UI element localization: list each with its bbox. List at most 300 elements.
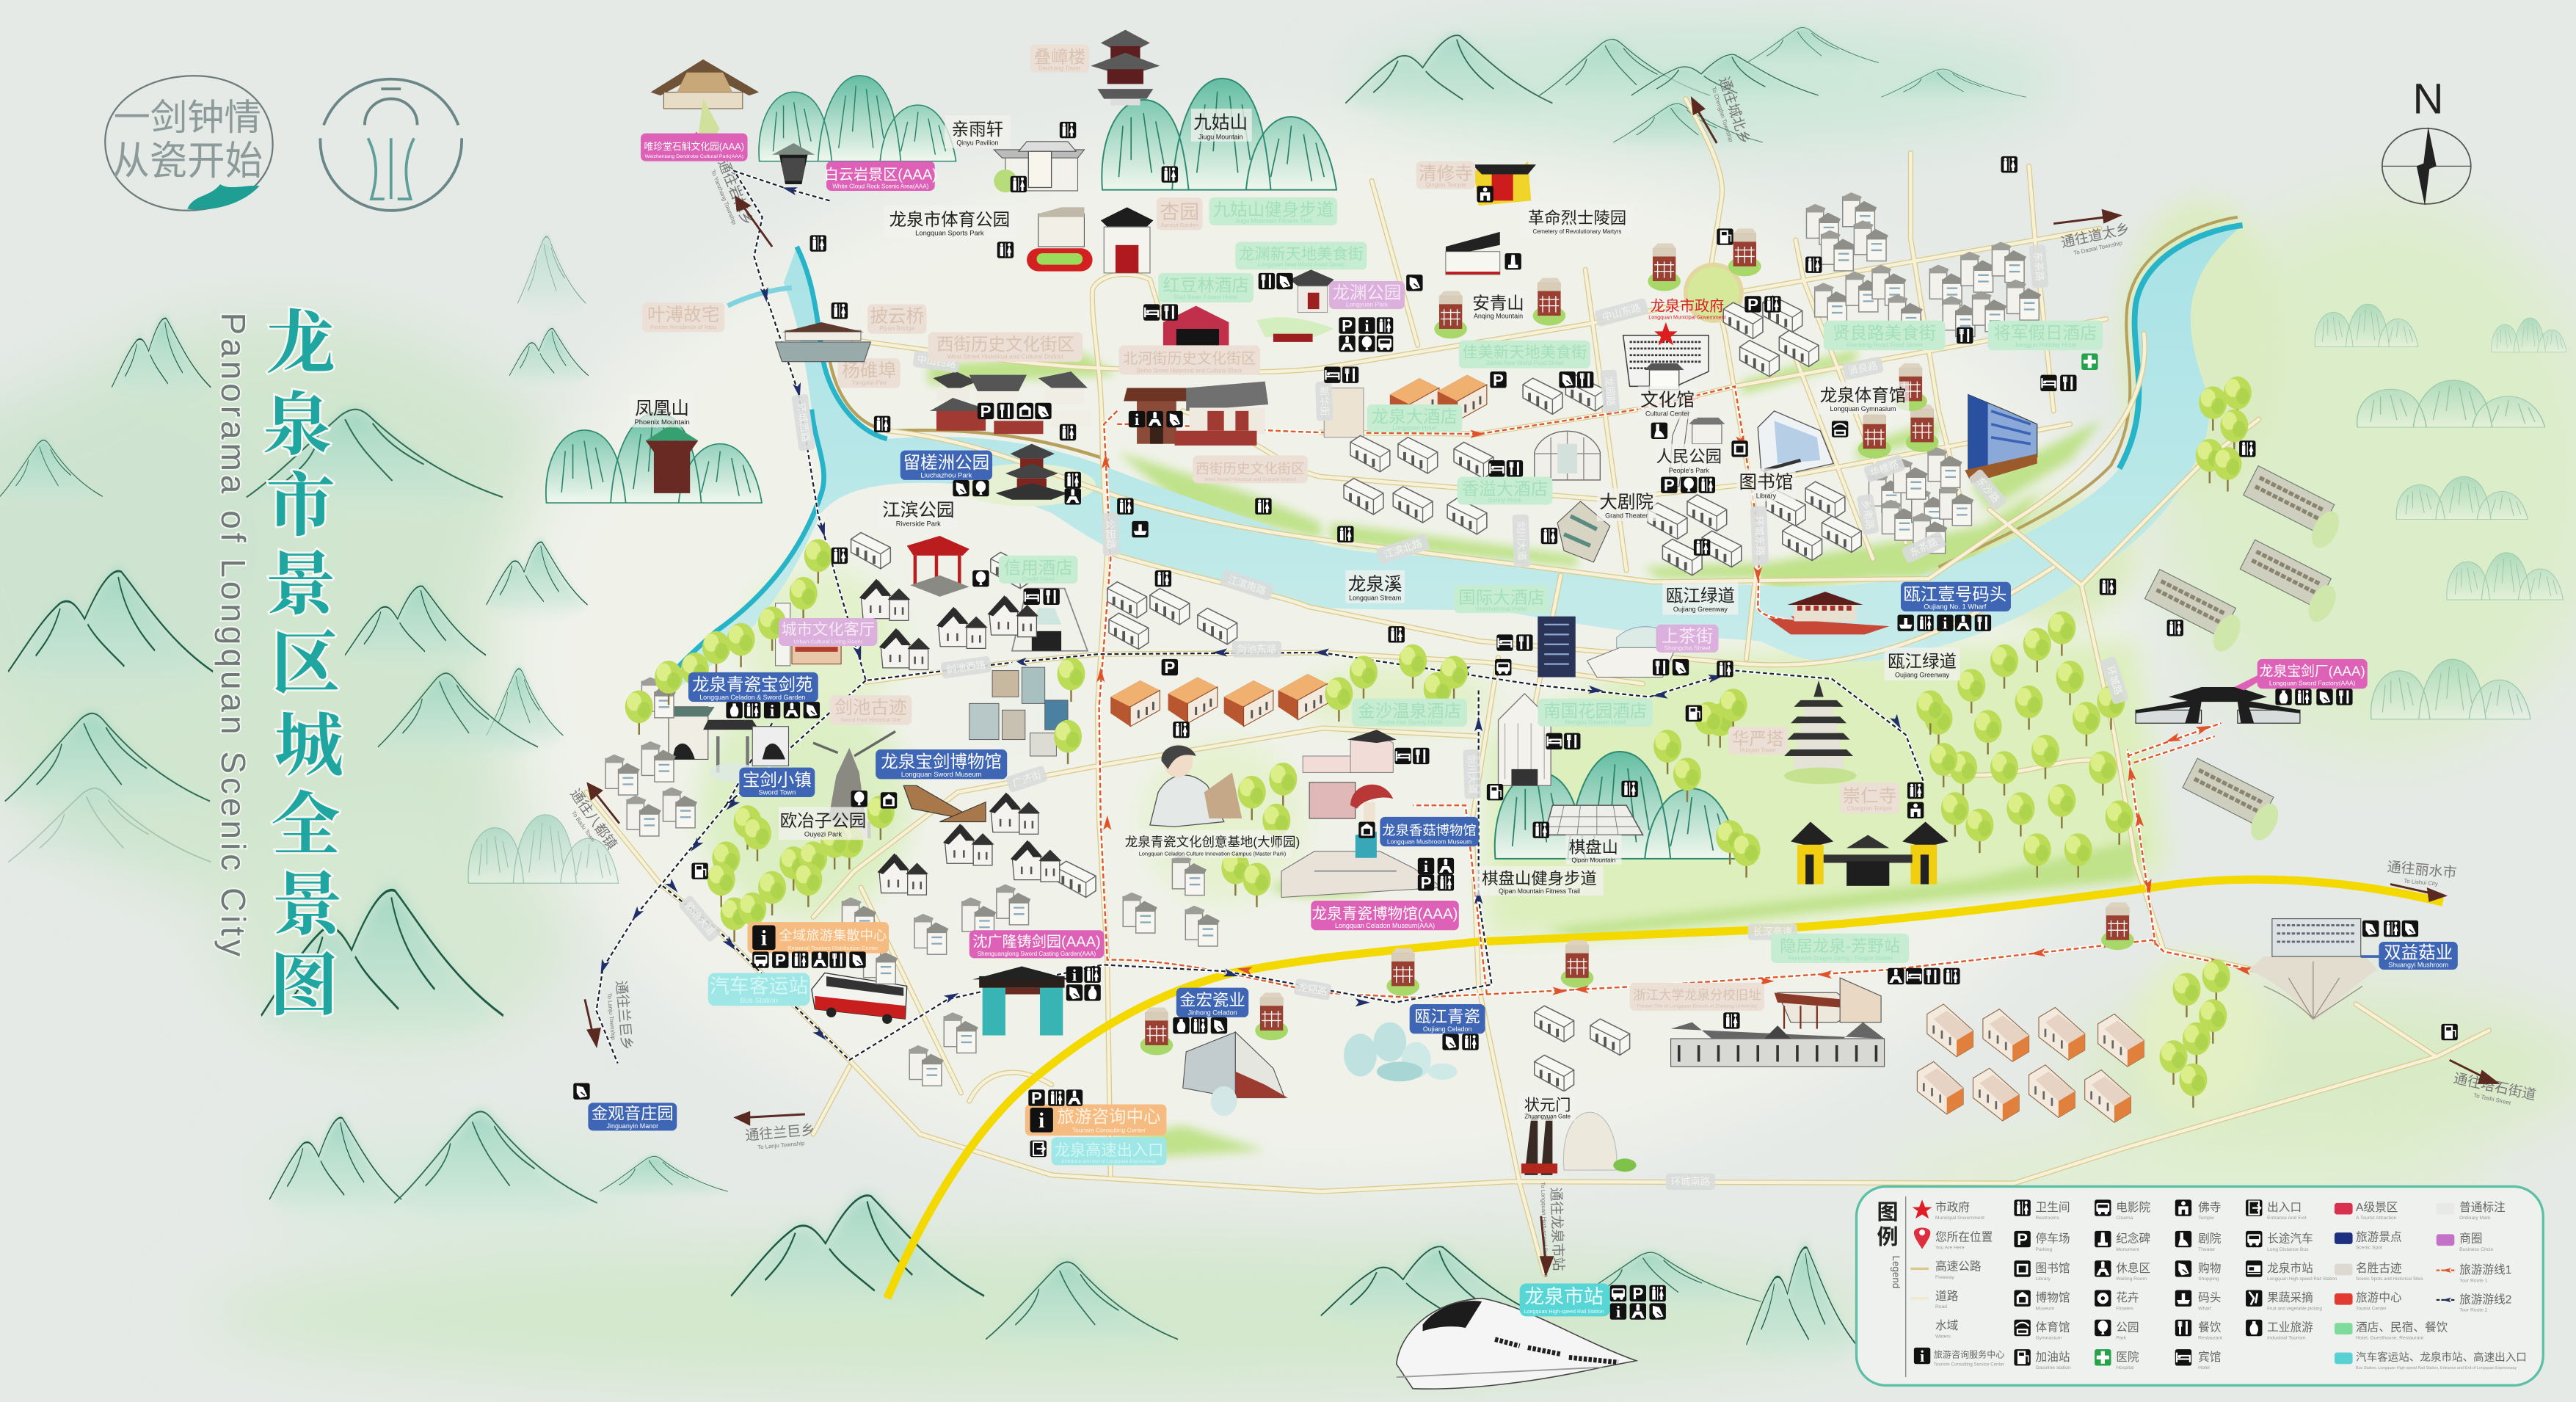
river: Oujiang and Longquan stream [657, 217, 2243, 690]
panel: legend [1857, 1186, 2543, 1385]
label: 大剧院: Grand Theater [1605, 512, 1648, 519]
legend column 2: Gasoline station [2036, 1365, 2071, 1370]
legend column 7: 旅游游线2 [2459, 1293, 2511, 1306]
label: 国际大酒店 [1454, 585, 1549, 613]
label: 旅游咨询中心 [1025, 1105, 1166, 1136]
label: 杨碓埠: Yangdui Pier [851, 379, 887, 386]
label: 龙泉市政府: 龙泉市政府 [1651, 297, 1724, 314]
legend column 2: Library [2036, 1276, 2051, 1282]
legend column 5: 工业旅游 [2267, 1321, 2313, 1334]
landmark: Former Zhejiang University site [1671, 1023, 1885, 1067]
road name labels: 欧冶大道 [683, 900, 717, 937]
label: 北河街历史文化街区: Beihe Street Historical and Cultural Block [1137, 367, 1242, 374]
label: 图书馆 [1736, 468, 1796, 501]
legend column 4: Restaurant [2198, 1336, 2222, 1341]
label: 龙泉大酒店: Longquan Hotel [1392, 424, 1436, 432]
legend column 5: Entrance And Exit [2267, 1216, 2307, 1221]
compass [2382, 76, 2471, 206]
road name labels [677, 244, 2129, 1190]
legend column 2: Museum [2036, 1306, 2055, 1311]
label: 瓯江绿道 west [1662, 582, 1738, 614]
road name labels: 龙园路 [1604, 376, 1617, 407]
label: 沈广隆铸剑园 [969, 930, 1104, 958]
legend column 7: Tour Route 1 [2459, 1278, 2488, 1283]
legend column 6: 汽车客运站、龙泉市站、高速出入口 [2356, 1351, 2527, 1364]
direction notes: To Daotai Township [2073, 239, 2123, 256]
label: 棋盘山 [1565, 835, 1621, 865]
label: 龙泉市体育公园 [884, 206, 1015, 239]
label: 隐居龙泉-芳野站: 隐居龙泉-芳野站 [1780, 937, 1900, 955]
label: 浙江大学龙泉分校旧址: Former Site of Longquan Branch of Zhejiang University [1637, 1003, 1758, 1009]
legend column 2: 图书馆 [2036, 1262, 2070, 1275]
road name labels: 长深高速 [1753, 926, 1792, 937]
legend column 5: Industrial Tourism [2267, 1336, 2306, 1341]
label: 龙泉宝剑厂 [2257, 659, 2368, 689]
legend column 4: 剧院 [2198, 1232, 2222, 1246]
label: 棋盘山健身步道: Qipan Mountain Fitness Trail [1499, 887, 1580, 895]
green parks and wash [698, 197, 2284, 1158]
legend column 4: 佛寺 [2198, 1201, 2221, 1214]
label: 龙泉市政府 [1648, 297, 1726, 321]
label: 剑池古迹 [829, 695, 912, 724]
label: 龙渊新天地美食街: 龙渊新天地美食街 [1239, 245, 1364, 263]
landmark: Apricot Garden gate [1101, 207, 1153, 273]
label: 沈广隆铸剑园: 沈广隆铸剑园(AAA) [972, 934, 1101, 951]
label: 瓯江青瓷 [1410, 1004, 1485, 1034]
title in Chinese: 全 [271, 769, 340, 868]
legend column 1: Freeway [1935, 1275, 1954, 1280]
legend column 1: 旅游咨询服务中心 [1934, 1348, 2004, 1359]
label: 将军假日酒店: 将军假日酒店 [1993, 323, 2097, 342]
label: 隐居龙泉-芳野站 [1771, 934, 1909, 963]
label: 杏园 [1157, 197, 1203, 230]
label: 安青山 [1470, 289, 1527, 321]
residential blocks [851, 296, 1861, 1092]
label: 龙泉青瓷博物馆 [1311, 901, 1459, 930]
legend column 2: Parking [2036, 1247, 2053, 1252]
direction notes: To Yanzhang Township [710, 169, 738, 226]
label: 龙泉溪: Longquan Stream [1349, 594, 1401, 601]
label: 龙泉香菇博物馆: 龙泉香菇博物馆 [1382, 822, 1477, 838]
red-brick buildings [1140, 228, 2134, 1055]
label: 革命烈士陵园: Cemetery of Revolutionary Martyrs [1533, 228, 1622, 235]
label: 龙泉青瓷文化创意基地: Longquan Celadon Culture Innovation Campus (Master Park) [1139, 850, 1286, 857]
legend column 7: 旅游游线1 [2459, 1263, 2511, 1276]
label: 龙泉宝剑博物馆: 龙泉宝剑博物馆 [881, 752, 1002, 771]
label: 人民公园: 人民公园 [1656, 447, 1722, 465]
hills: east pale range [2315, 304, 2566, 719]
label: 九姑山健身步道: 九姑山健身步道 [1213, 200, 1334, 219]
label: 披云桥: 披云桥 [870, 306, 924, 327]
route arrows [597, 184, 2252, 1043]
landmark: Nanguo Garden Hotel [1499, 694, 1551, 785]
road name labels: 东茶路 [2032, 251, 2045, 282]
label: 西街历史文化街区 south: 西街历史文化街区 [1196, 461, 1305, 476]
label: 红豆林酒店 [1158, 273, 1254, 302]
direction notes: 通往塔石街道 [2452, 1070, 2537, 1103]
landmark: Weizhentang park pavilion [650, 59, 759, 148]
landmark: Gymnasium [1758, 411, 1833, 476]
label: 江滨公园: 江滨公园 [882, 500, 955, 520]
label: 将军假日酒店: Jiangjun Holiday Hotel [2015, 341, 2076, 349]
label: 龙泉青瓷文化创意基地: 龙泉青瓷文化创意基地(大师园) [1125, 835, 1300, 849]
label: 龙泉青瓷文化创意基地 [1125, 830, 1300, 858]
direction notes: To Badu Town [570, 810, 596, 843]
label: 佳美新天地美食街: 佳美新天地美食街 [1462, 344, 1587, 361]
label: 金宏瓷业: 金宏瓷业 [1179, 991, 1245, 1009]
legend column 5: 果蔬采摘 [2267, 1291, 2313, 1304]
label: 安青山: Anqing Mountain [1474, 312, 1523, 319]
legend column 6: 名胜古迹 [2356, 1262, 2402, 1275]
label: 华严塔 [1728, 727, 1788, 755]
landmark: Red Bean Forest Hotel [1163, 306, 1229, 350]
landmark: Black lantern pavilion [772, 143, 815, 184]
road name labels: 剑川大道 [1466, 755, 1478, 794]
label: 九姑山: 九姑山 [1193, 112, 1248, 133]
label: 叶溥故宅 [642, 302, 724, 332]
direction notes: 通往城北乡 [1716, 75, 1753, 146]
direction notes: To Lanju Township [606, 992, 616, 1041]
label: 西街历史文化街区 north [928, 332, 1083, 362]
label: 棋盘山: 棋盘山 [1569, 838, 1618, 857]
label: 佳美新天地美食街: Jiamei New World Food Street [1485, 360, 1564, 366]
expressway [887, 879, 2443, 1299]
legend column 4: Theater [2198, 1247, 2216, 1252]
label: 留槎洲公园: Liuchazhou Park [920, 471, 972, 479]
label: 唯珍堂石斛文化园: Weizhentang Dendrobe Cultural Park(AAA) [645, 154, 743, 159]
label: 金观音庄园 [588, 1103, 677, 1130]
road name labels: 广济街 [1011, 769, 1043, 789]
label: 瓯江壹号码头 [1901, 582, 2011, 611]
label: 西街历史文化街区 north: West Street Historical and Cultural District [947, 352, 1064, 360]
label: 欧冶子公园 [779, 807, 867, 840]
title in Chinese: 景 [266, 529, 337, 628]
label: 清修寺 [1416, 161, 1475, 189]
label: 金沙温泉酒店: Jinsha Hot Spring Hotel [1377, 718, 1442, 725]
label: 龙泉市站 [1520, 1284, 1610, 1316]
direction notes: To Longquan High-speed Rail Station [1540, 1182, 1549, 1277]
label: 龙泉市站: 龙泉市站 [1524, 1285, 1604, 1307]
direction notes: 通往兰巨乡 [744, 1122, 815, 1144]
label: 留槎洲公园 [900, 451, 992, 480]
label: 红豆林酒店: 红豆林酒店 [1163, 275, 1249, 294]
legend column 7 [2437, 1201, 2511, 1313]
label: 双益菇业: Shuangyi Mushroom [2388, 962, 2448, 969]
label: 金沙温泉酒店: 金沙温泉酒店 [1358, 701, 1461, 720]
label: 沈广隆铸剑园: Shenguanglong Sword Casting Garden(AAA) [978, 951, 1096, 957]
compass: N [2413, 76, 2444, 123]
label: 白云岩景区: White Cloud Rock Scenic Area(AAA) [832, 184, 929, 190]
landmark: Martyrs Cemetery [1446, 232, 1500, 275]
legend column 7: Ordinary Mark [2459, 1216, 2491, 1221]
logo: vase circle [320, 79, 462, 211]
landmark: Zhuangyuan gate [1521, 1112, 1637, 1175]
landmark: Diezhang Tower [1091, 30, 1160, 106]
landmark: Jiangjun Holiday Hotel [1965, 395, 2037, 483]
label: 龙泉香菇博物馆 [1380, 817, 1479, 846]
label: 白云岩景区 [824, 161, 937, 191]
label: 金观音庄园: Jinguanyin Manor [607, 1122, 658, 1130]
label: 汽车客运站 [708, 973, 810, 1006]
legend column 3: 医院 [2116, 1350, 2139, 1364]
label: 文化馆: Cultural Center [1645, 410, 1689, 418]
legend column 2 [2014, 1199, 2071, 1370]
label: 西街历史文化街区 south: West Street Historical and Cultural District [1204, 477, 1296, 482]
map service icons [573, 122, 2458, 1321]
label: 披云桥 [867, 304, 927, 334]
label: 叠嶂楼: Diezhang Tower [1038, 65, 1081, 71]
label: 汽车客运站: 汽车客运站 [710, 975, 808, 997]
label: 龙泉大酒店 [1367, 404, 1462, 432]
landmark: Urban Cultural Living Room [776, 603, 841, 666]
label: 南国花园酒店: Nanguo Garden Hotel [1565, 718, 1626, 725]
legend heading: 图 [1877, 1201, 1899, 1224]
legend column 4: 宾馆 [2198, 1351, 2221, 1364]
label: 崇仁寺 [1840, 782, 1899, 813]
legend column 2: 加油站 [2036, 1351, 2070, 1364]
label: 龙泉香菇博物馆: Longquan Mushroom Museum [1387, 838, 1471, 846]
landmark: Longquan Hotel block [1324, 388, 1364, 437]
road name labels: 环城西路 [795, 402, 812, 443]
road name labels: 剑川大道 [1515, 521, 1527, 561]
legend column 2: 体育馆 [2036, 1321, 2070, 1334]
label: 龙渊新天地美食街: Longyuan New World Food Street [1258, 261, 1345, 268]
label: 旅游咨询中心: 旅游咨询中心 [1058, 1107, 1161, 1126]
landmark: Culture Center and People's Park [1669, 411, 1725, 487]
direction notes: To Lanju Township [757, 1140, 805, 1151]
mountains: west range [0, 236, 619, 1050]
label: 崇仁寺: 崇仁寺 [1843, 786, 1896, 807]
label: 全域旅游集散中心: Regional Tourism Distribution Center [787, 945, 878, 951]
legend column 6 [2335, 1201, 2527, 1370]
title in Chinese: 龙 [266, 287, 335, 386]
label: 龙泉宝剑厂: Longquan Sword Factory(AAA) [2269, 680, 2356, 687]
label: 叠嶂楼: 叠嶂楼 [1034, 47, 1085, 66]
legend column 2: 博物馆 [2036, 1291, 2070, 1304]
label: 隐居龙泉-芳野站: Reclusive Dragon Spring - Fangye Station [1788, 955, 1892, 962]
label: 龙泉溪 [1345, 570, 1405, 603]
label: 龙泉宝剑博物馆 [876, 749, 1007, 779]
hill: Jiugu Mountain [1102, 79, 1336, 190]
legend column 6: Scenic Spot [2356, 1246, 2382, 1251]
label: 文化馆: 文化馆 [1640, 390, 1695, 410]
legend column 5: Long Distance Bus [2267, 1247, 2309, 1252]
title in English: Panorama of Longquan Scenic City [214, 313, 252, 956]
label: 信用酒店 [999, 556, 1077, 584]
label: 白云岩景区: 白云岩景区(AAA) [824, 166, 937, 183]
label: 状元门: 状元门 [1524, 1096, 1571, 1114]
label: 杏园: 杏园 [1160, 201, 1199, 223]
figure: celadon master artisan [1150, 744, 1242, 827]
label: 留槎洲公园: 留槎洲公园 [903, 453, 989, 472]
legend column 5 [2246, 1199, 2337, 1341]
label: 南国花园酒店 [1538, 699, 1653, 727]
label: 宝剑小镇: Sword Town [758, 788, 796, 796]
label: 城市文化客厅 [779, 618, 877, 646]
landmark: Museum complex [969, 661, 1076, 756]
label: 旅游咨询中心: i [1038, 1109, 1044, 1133]
label: 亲雨轩 [945, 115, 1011, 148]
landmark: Beihe Street gate [1124, 382, 1268, 446]
label: 龙泉青瓷宝剑苑: 龙泉青瓷宝剑苑 [692, 675, 812, 694]
label: 龙泉体育馆 [1817, 382, 1909, 414]
landmark: Fangye Station [1775, 978, 1881, 1029]
landmark: Sword Factory gate [2136, 674, 2300, 723]
label: 佳美新天地美食街 [1459, 341, 1590, 368]
legend column 7: 商圈 [2459, 1232, 2482, 1246]
legend column 3: Waiting Room [2116, 1276, 2147, 1282]
label: 图书馆: Library [1756, 493, 1777, 500]
label: 瓯江绿道 east: Oujiang Greenway [1895, 672, 1950, 679]
logo: slogan seal [105, 76, 273, 211]
legend column 6: 旅游景点 [2356, 1230, 2402, 1243]
label: 龙泉高速出入口: Entrance and exit of Longquan Expressway [1061, 1159, 1157, 1164]
label: 文化馆 [1638, 386, 1697, 419]
legend column 3: Monument [2116, 1247, 2139, 1252]
logo: slogan seal: 一剑钟情 [113, 98, 261, 138]
label: 九姑山健身步道: Jiugu Mountain Fitness Trail [1234, 217, 1312, 225]
road name labels: 环城路 [2105, 665, 2125, 697]
label: 状元门 [1520, 1092, 1576, 1121]
landmark: Sword Museum wedges [903, 785, 986, 822]
legend column 3: 纪念碑 [2116, 1232, 2151, 1246]
label: 龙泉市体育公园: 龙泉市体育公园 [889, 210, 1010, 229]
legend column 4: Temple [2198, 1216, 2214, 1221]
label: 人民公园: People's Park [1669, 467, 1709, 474]
label: 安青山: 安青山 [1472, 294, 1524, 313]
label: 贤良路美食街: 贤良路美食街 [1833, 323, 1936, 342]
label: 杏园: Apricot Garden [1161, 222, 1198, 228]
landmark: Chongren Temple [1791, 822, 1949, 886]
label: 瓯江青瓷: 瓯江青瓷 [1414, 1008, 1480, 1026]
label: 瓯江绿道 east: 瓯江绿道 [1888, 652, 1957, 671]
label: 瓯江青瓷: Oujiang Celadon [1423, 1025, 1471, 1033]
direction notes: 通往八都镇 [567, 786, 620, 852]
landmark: Jinsha hotel row [1303, 730, 1397, 772]
label: 金观音庄园: 金观音庄园 [592, 1105, 674, 1123]
hill: Qipan Mountain [1495, 752, 1739, 859]
legend heading: 例 [1877, 1225, 1899, 1249]
label: 剑池古迹: Sword Pool Historical Site [840, 717, 901, 723]
legend column 3: 休息区 [2116, 1262, 2150, 1275]
legend column 4 [2175, 1199, 2222, 1370]
legend column 5: Fruit and vegetable picking [2267, 1306, 2322, 1311]
label: 华严塔: Huayan Tower [1739, 747, 1777, 753]
label: 华严塔: 华严塔 [1732, 729, 1783, 748]
label: 龙泉宝剑厂: 龙泉宝剑厂(AAA) [2260, 663, 2365, 678]
road name labels: 贤良路 [1847, 360, 1879, 377]
legend column 3: Flowers [2116, 1306, 2133, 1311]
legend column 1: 水域 [1935, 1319, 1959, 1332]
legend column 1: 您所在位置 [1935, 1230, 1993, 1243]
road name labels: 中山西路 [916, 354, 957, 370]
legend column 5: 龙泉市站 [2267, 1262, 2313, 1275]
label: 金宏瓷业 [1176, 988, 1248, 1017]
title in Chinese [263, 287, 343, 1029]
landmark: Piyun covered bridge [776, 322, 870, 362]
legend column 4: 餐饮 [2198, 1321, 2222, 1334]
label: 欧冶子公园: 欧冶子公园 [780, 811, 866, 830]
vehicle: red double-decker bus [812, 973, 907, 1024]
legend column 3: Cinema [2116, 1216, 2133, 1221]
label: 龙渊新天地美食街 [1235, 241, 1367, 269]
legend column 1: Tourism Consulting Service Center [1934, 1362, 2004, 1367]
mountains: north range [1345, 27, 2026, 152]
legend column 4: Shopping [2198, 1276, 2219, 1282]
landmark: Grand Theater [1557, 501, 1610, 562]
legend column 1: You Are Here [1935, 1246, 1965, 1251]
label: 香溢大酒店: 香溢大酒店 [1462, 479, 1548, 498]
label: 全域旅游集散中心: i [761, 926, 767, 950]
title in Chinese: 城 [274, 690, 343, 789]
label: 状元门: Zhuangyuan Gate [1524, 1114, 1571, 1120]
legend column 3: 公园 [2116, 1321, 2139, 1334]
tour route 1 (orange) [1099, 386, 2268, 998]
landmark: West Street houses [930, 371, 1091, 434]
label: 图书馆: 图书馆 [1739, 472, 1793, 493]
roundabout [1686, 265, 1742, 321]
road name labels: 乡南路 [1860, 499, 1876, 531]
label: 龙渊公园: Longyuan Park [1346, 301, 1389, 308]
label: 香溢大酒店 [1458, 476, 1552, 504]
label: 棋盘山: Qipan Mountain [1571, 856, 1616, 863]
label: 人民公园 [1656, 444, 1722, 476]
landmark: Celadon museum [1281, 832, 1442, 898]
legend column 6: Scenic Spots and Historical Sites [2356, 1276, 2423, 1282]
orange-roof houses [1110, 375, 2144, 1122]
title in Chinese: 图 [269, 930, 338, 1029]
label: 龙泉青瓷宝剑苑 [688, 672, 818, 702]
label: 龙泉市体育公园: Longquan Sports Park [915, 228, 984, 236]
legend column 6: 旅游中心 [2356, 1291, 2402, 1304]
apartment clusters [605, 192, 2041, 1086]
label: 瓯江壹号码头: Oujiang No. 1 Wharf [1924, 603, 1987, 611]
label: 剑池古迹: 剑池古迹 [834, 697, 907, 718]
label: 宝剑小镇 [739, 768, 815, 797]
label: 九姑山 [1191, 109, 1252, 142]
direction notes: 通往兰巨乡 [613, 980, 635, 1050]
label: 亲雨轩: Qinyu Pavilion [956, 139, 999, 146]
road name labels: 江滨南路 [1226, 574, 1267, 597]
road name labels: 中山东路 [1601, 302, 1642, 323]
road name labels: 环城南路 [1671, 1176, 1711, 1187]
legend column 7: 普通标注 [2459, 1201, 2506, 1214]
label: 龙渊公园 [1329, 281, 1405, 309]
legend column 2: Gymnasium [2036, 1336, 2062, 1341]
label: 金沙温泉酒店 [1352, 699, 1467, 727]
label: 龙泉宝剑博物馆: Longquan Sword Museum [901, 770, 982, 778]
label: 清修寺: Qingxiu Temple [1425, 181, 1466, 188]
label: 革命烈士陵园: 革命烈士陵园 [1528, 209, 1626, 228]
tour route 2 (black) [597, 171, 1924, 1064]
label: 全域旅游集散中心 [748, 922, 889, 954]
label: 江滨公园 [879, 496, 958, 529]
label: 崇仁寺: Chongren Temple [1847, 805, 1892, 812]
legend column 3 [2095, 1199, 2151, 1370]
label: 龙泉大酒店: 龙泉大酒店 [1372, 407, 1458, 426]
road name labels: 剑池西路 [946, 659, 986, 675]
label: 杨碓埠 [838, 358, 900, 388]
label: 大剧院 [1597, 488, 1656, 521]
label: 九姑山: Jiugu Mountain [1198, 133, 1243, 140]
label: 叶溥故宅: Former Residence of Yepu [650, 324, 716, 330]
landmark: Ouyezi statue [813, 731, 895, 838]
label: 龙泉体育馆: Longquan Gymnasium [1830, 405, 1896, 413]
label: 龙泉青瓷宝剑苑: Longquan Celadon & Sword Garden [699, 694, 805, 701]
direction notes: To Tashi Street [2473, 1092, 2512, 1106]
label: 大剧院: 大剧院 [1599, 492, 1653, 512]
legend column 6: Bus Station, Longquan High-speed Rail Station, Entrance and Exit of Longquan Expressway [2356, 1366, 2517, 1370]
